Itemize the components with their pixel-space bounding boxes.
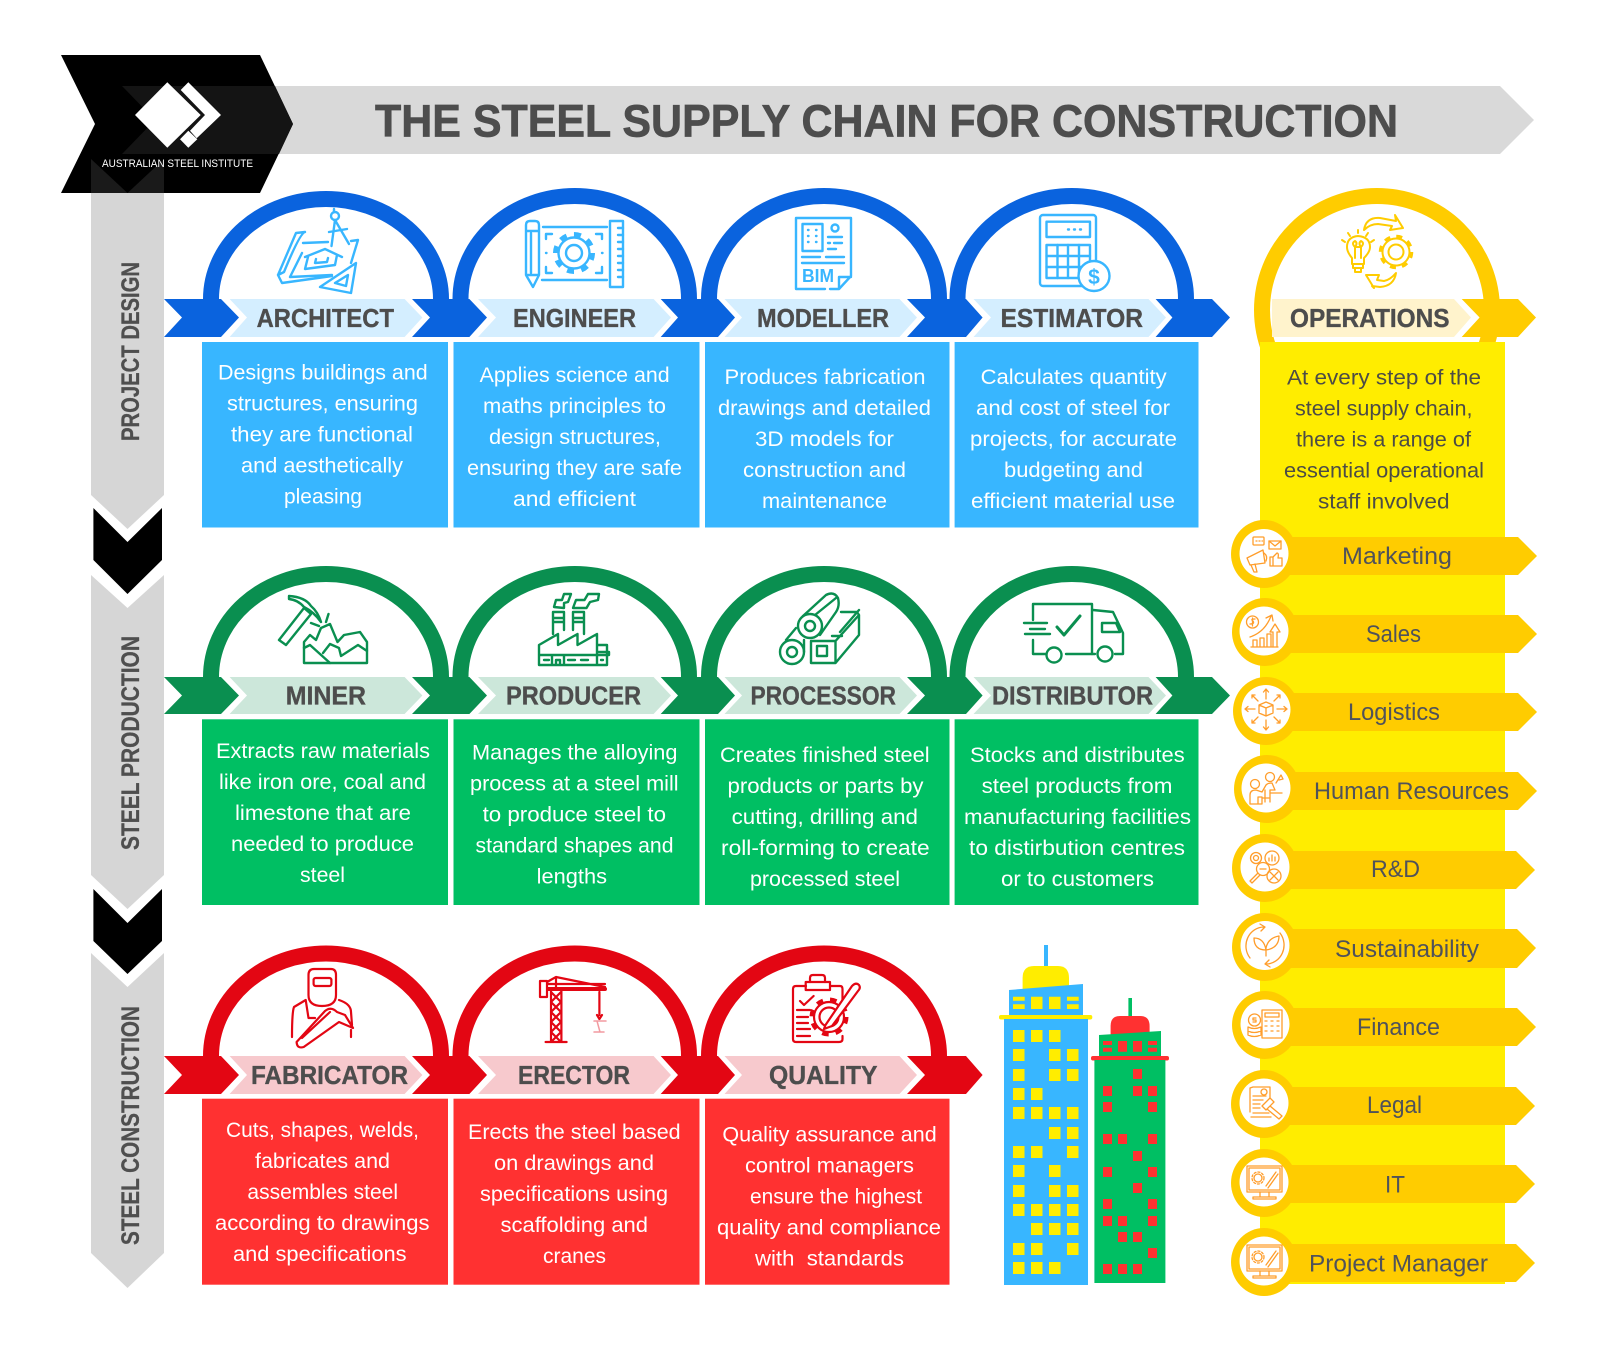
chevron band — [164, 299, 1230, 337]
icon: fabricator welder — [292, 969, 353, 1047]
panel: steel production row — [164, 574, 1230, 905]
text box: modeller — [705, 342, 950, 528]
icon: modeller BIM document: BIM — [802, 266, 834, 286]
label: engineer: ENGINEER — [513, 305, 636, 333]
row: r&d: R&D — [1371, 856, 1420, 883]
icon: it monitor — [1247, 1166, 1282, 1199]
icon: erector tower crane — [540, 977, 606, 1042]
row: finance — [1232, 991, 1536, 1059]
illustration: blue tower — [999, 945, 1092, 1285]
text box: producer: process at a steel mill — [470, 772, 679, 796]
text box: modeller: Produces fabrication — [724, 365, 926, 389]
text box: quality: ensure the highest — [750, 1184, 922, 1208]
text box: modeller: maintenance — [762, 489, 887, 513]
arches — [211, 574, 1186, 682]
row: it — [1231, 1149, 1535, 1217]
chevron band — [164, 1056, 983, 1094]
panel: steel construction row — [164, 954, 983, 1285]
text box: architect: structures, ensuring — [227, 392, 418, 416]
icon: marketing megaphone — [1247, 537, 1282, 572]
text box: miner: needed to produce — [231, 832, 414, 856]
row: marketing: Marketing — [1342, 543, 1452, 570]
icon: finance coins and calculator — [1248, 1010, 1282, 1038]
icon: architect blueprint — [278, 209, 358, 293]
row: r&d — [1232, 834, 1535, 902]
text box: quality: Quality assurance and — [722, 1122, 937, 1146]
text box: engineer: design structures, — [489, 425, 661, 449]
text box: producer — [454, 719, 700, 905]
arrow: project design to steel production — [93, 508, 162, 594]
text box: fabricator: and specifications — [233, 1242, 407, 1266]
stage column: steel construction — [91, 953, 164, 1288]
text box: processor: Creates finished steel — [720, 743, 930, 767]
text box: quality: with standards — [754, 1246, 904, 1270]
icon: r&d gear lens atom — [1250, 851, 1281, 883]
illustration: green tower — [1091, 998, 1169, 1283]
text box: quality — [705, 1099, 950, 1285]
column: operations background and intro text: there is a range of — [1296, 428, 1471, 452]
icon: estimator calculator — [1040, 215, 1110, 291]
icon: operations idea and gear — [1342, 215, 1412, 288]
text box: processor — [705, 719, 950, 905]
text box: engineer: and efficient — [513, 487, 636, 511]
text box: erector: cranes — [543, 1244, 606, 1268]
text box: estimator: projects, for accurate — [970, 427, 1177, 451]
text box: architect: Designs buildings and — [218, 361, 428, 385]
text box: miner: limestone that are — [235, 801, 411, 825]
row: project manager: Project Manager — [1309, 1250, 1488, 1278]
text box: architect: pleasing — [284, 485, 362, 509]
text box: quality: quality and compliance — [717, 1216, 941, 1240]
icon: modeller BIM document — [796, 218, 851, 289]
label: modeller: MODELLER — [757, 305, 889, 333]
icon: sustainability leaf and cycle — [1246, 924, 1284, 967]
column: operations background and intro text: staff involved — [1318, 490, 1450, 514]
chevron band — [164, 677, 1230, 714]
text box: miner: like iron ore, coal and — [219, 770, 426, 794]
label: erector: ERECTOR — [518, 1062, 630, 1090]
icon: engineer drawing — [526, 221, 623, 287]
text box: fabricator: fabricates and — [255, 1149, 390, 1173]
label: quality: QUALITY — [769, 1062, 878, 1090]
icon: legal document and gavel — [1250, 1087, 1282, 1119]
text box: estimator: and cost of steel for — [976, 396, 1170, 420]
title banner — [122, 86, 1534, 154]
row: finance: Finance — [1357, 1014, 1440, 1041]
text box: producer: to produce steel to — [483, 802, 666, 826]
icon: sales growth chart — [1246, 615, 1280, 647]
row: project manager — [1231, 1228, 1535, 1296]
panel: project design row — [164, 196, 1230, 528]
text box: distributor: manufacturing facilities — [964, 805, 1191, 829]
text box: erector: Erects the steel based — [468, 1120, 681, 1144]
row: logistics: Logistics — [1348, 699, 1440, 726]
title banner: THE STEEL SUPPLY CHAIN FOR CONSTRUCTION — [375, 96, 1398, 146]
stage column: steel production — [91, 575, 164, 909]
column: operations background and intro text: At every step of the — [1287, 366, 1481, 390]
icon: processor rolls and beams — [780, 594, 859, 664]
arches — [211, 196, 1186, 304]
text box: fabricator: assembles steel — [247, 1180, 398, 1204]
icon: producer factory — [539, 594, 609, 665]
label: miner: MINER — [286, 682, 366, 710]
row: it: IT — [1385, 1172, 1405, 1198]
text box: processor: processed steel — [750, 867, 900, 891]
row: human resources: Human Resources — [1314, 778, 1509, 805]
icon: quality clipboard and gear — [793, 975, 860, 1042]
text box: modeller: drawings and detailed — [718, 396, 931, 420]
text box: architect: and aesthetically — [241, 454, 403, 478]
stage column: steel construction: STEEL CONSTRUCTION — [117, 1006, 145, 1245]
text box: miner: steel — [300, 863, 345, 887]
row: legal: Legal — [1367, 1092, 1422, 1119]
stage column: project design: PROJECT DESIGN — [117, 262, 145, 441]
text box: erector: scaffolding and — [500, 1213, 648, 1237]
text box: engineer: Applies science and — [480, 363, 670, 387]
column: operations background and intro text: steel supply chain, — [1295, 397, 1472, 421]
text box: distributor: or to customers — [1001, 867, 1154, 891]
text box: miner: Extracts raw materials — [216, 739, 430, 763]
text box: architect — [202, 342, 448, 528]
text box: distributor: steel products from — [982, 774, 1172, 798]
row: sales: Sales — [1366, 621, 1421, 648]
label: estimator: ESTIMATOR — [1000, 305, 1143, 333]
text box: erector: on drawings and — [494, 1151, 654, 1175]
text box: producer: Manages the alloying — [472, 740, 678, 764]
text box: processor: products or parts by — [728, 774, 924, 798]
column: operations background and intro text: essential operational — [1284, 459, 1484, 483]
row: sustainability: Sustainability — [1335, 936, 1480, 963]
icon: distributor delivery truck — [1024, 604, 1123, 662]
row: sustainability — [1232, 913, 1536, 981]
text box: processor: roll-forming to create — [721, 836, 930, 860]
text box: distributor: Stocks and distributes — [970, 743, 1185, 767]
icon: miner pick and rock — [279, 596, 367, 663]
text box: estimator: efficient material use — [971, 489, 1175, 513]
icon: human resources figures — [1250, 772, 1283, 804]
arches — [211, 954, 939, 1061]
label: distributor: DISTRIBUTOR — [992, 682, 1153, 710]
text box: producer: standard shapes and — [476, 834, 674, 858]
text box: modeller: 3D models for — [755, 427, 894, 451]
text box: erector: specifications using — [480, 1182, 668, 1206]
text box: erector — [454, 1099, 700, 1285]
text box: producer: lengths — [537, 864, 607, 888]
text box: engineer: maths principles to — [483, 394, 666, 418]
text box: distributor — [955, 719, 1198, 905]
row: marketing — [1231, 520, 1537, 588]
text box: fabricator: Cuts, shapes, welds, — [226, 1118, 419, 1142]
icon: project manager monitor — [1247, 1245, 1282, 1278]
text box: distributor: to distirbution centres — [969, 836, 1185, 860]
text box: engineer: ensuring they are safe — [467, 456, 682, 480]
icon: estimator calculator: $ — [1088, 266, 1100, 289]
text box: estimator: Calculates quantity — [981, 365, 1167, 389]
arch: operations — [1262, 196, 1492, 424]
row: logistics — [1233, 677, 1537, 745]
label band: operations — [1272, 299, 1536, 337]
text box: engineer — [454, 342, 700, 528]
text box: architect: they are functional — [231, 423, 413, 447]
text box: quality: control managers — [745, 1154, 914, 1178]
text box: fabricator — [202, 1099, 448, 1285]
row: legal — [1231, 1070, 1535, 1138]
text box: fabricator: according to drawings — [215, 1211, 430, 1235]
text box: estimator: budgeting and — [1004, 458, 1143, 482]
text box: miner — [202, 719, 448, 905]
text box: estimator — [955, 342, 1198, 528]
row: human resources — [1234, 755, 1537, 823]
text box: processor: cutting, drilling and — [732, 805, 918, 829]
label: architect: ARCHITECT — [257, 305, 394, 333]
logo: Australian Steel Institute — [61, 55, 293, 193]
column: operations background and intro text — [1260, 342, 1505, 1284]
text box: modeller: construction and — [743, 458, 906, 482]
label: producer: PRODUCER — [506, 682, 641, 710]
label: processor: PROCESSOR — [750, 682, 896, 710]
stage column: project design — [91, 159, 164, 529]
panel: operations — [1231, 196, 1537, 1296]
logo: Australian Steel Institute: AUSTRALIAN STEEL INSTITUTE — [102, 158, 253, 170]
icon: logistics box with arrows — [1245, 689, 1287, 730]
arrow: steel production to steel construction — [93, 889, 162, 974]
label: fabricator: FABRICATOR — [251, 1062, 408, 1090]
stage column: steel production: STEEL PRODUCTION — [117, 636, 145, 850]
row: sales — [1232, 598, 1537, 666]
label band: operations: OPERATIONS — [1290, 305, 1450, 333]
